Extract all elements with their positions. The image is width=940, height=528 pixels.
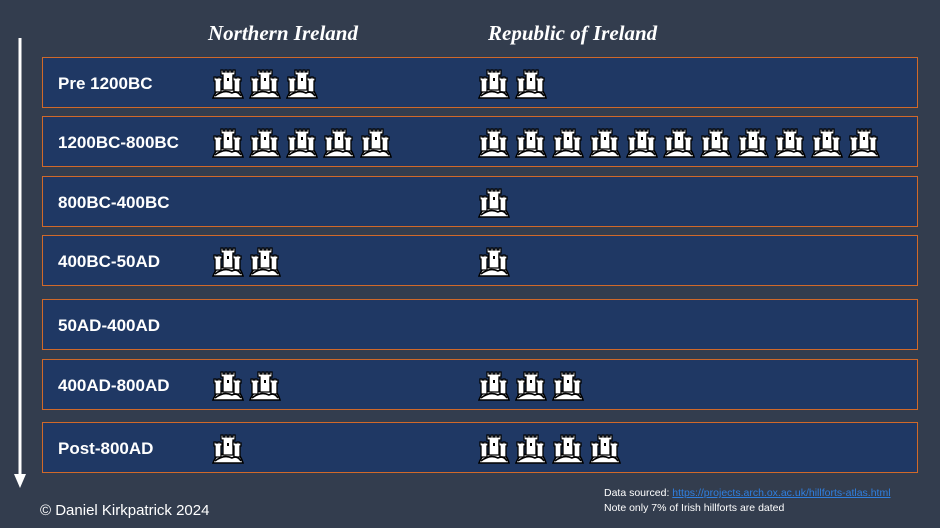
source note: Data sourced: https://projects.arch.ox.ac.uk/hillforts-atlas.html xyxy=(604,487,891,499)
row: Post-800AD xyxy=(42,422,918,473)
source note xyxy=(604,487,891,514)
row: Post-800AD: Post-800AD xyxy=(58,439,153,458)
row: Pre 1200BC: Pre 1200BC xyxy=(58,74,153,93)
row: Pre 1200BC xyxy=(42,57,918,108)
copyright: © Daniel Kirkpatrick 2024 xyxy=(40,502,209,519)
row: 50AD-400AD xyxy=(42,299,918,350)
row: 1200BC-800BC xyxy=(42,116,918,167)
row: 1200BC-800BC: 1200BC-800BC xyxy=(58,133,179,152)
source note: Note only 7% of Irish hillforts are dated xyxy=(604,502,784,514)
row: 400BC-50AD xyxy=(42,235,918,286)
heading: Northern Ireland: Northern Ireland xyxy=(208,21,358,45)
row: 400AD-800AD xyxy=(42,359,918,410)
row: 400AD-800AD: 400AD-800AD xyxy=(58,376,170,395)
row: 800BC-400BC: 800BC-400BC xyxy=(58,193,170,212)
heading: Republic of Ireland: Republic of Ireland xyxy=(488,21,657,45)
row: 400BC-50AD: 400BC-50AD xyxy=(58,252,160,271)
arrow: timeline xyxy=(14,38,26,488)
row: 50AD-400AD: 50AD-400AD xyxy=(58,316,160,335)
row: 800BC-400BC xyxy=(42,176,918,227)
